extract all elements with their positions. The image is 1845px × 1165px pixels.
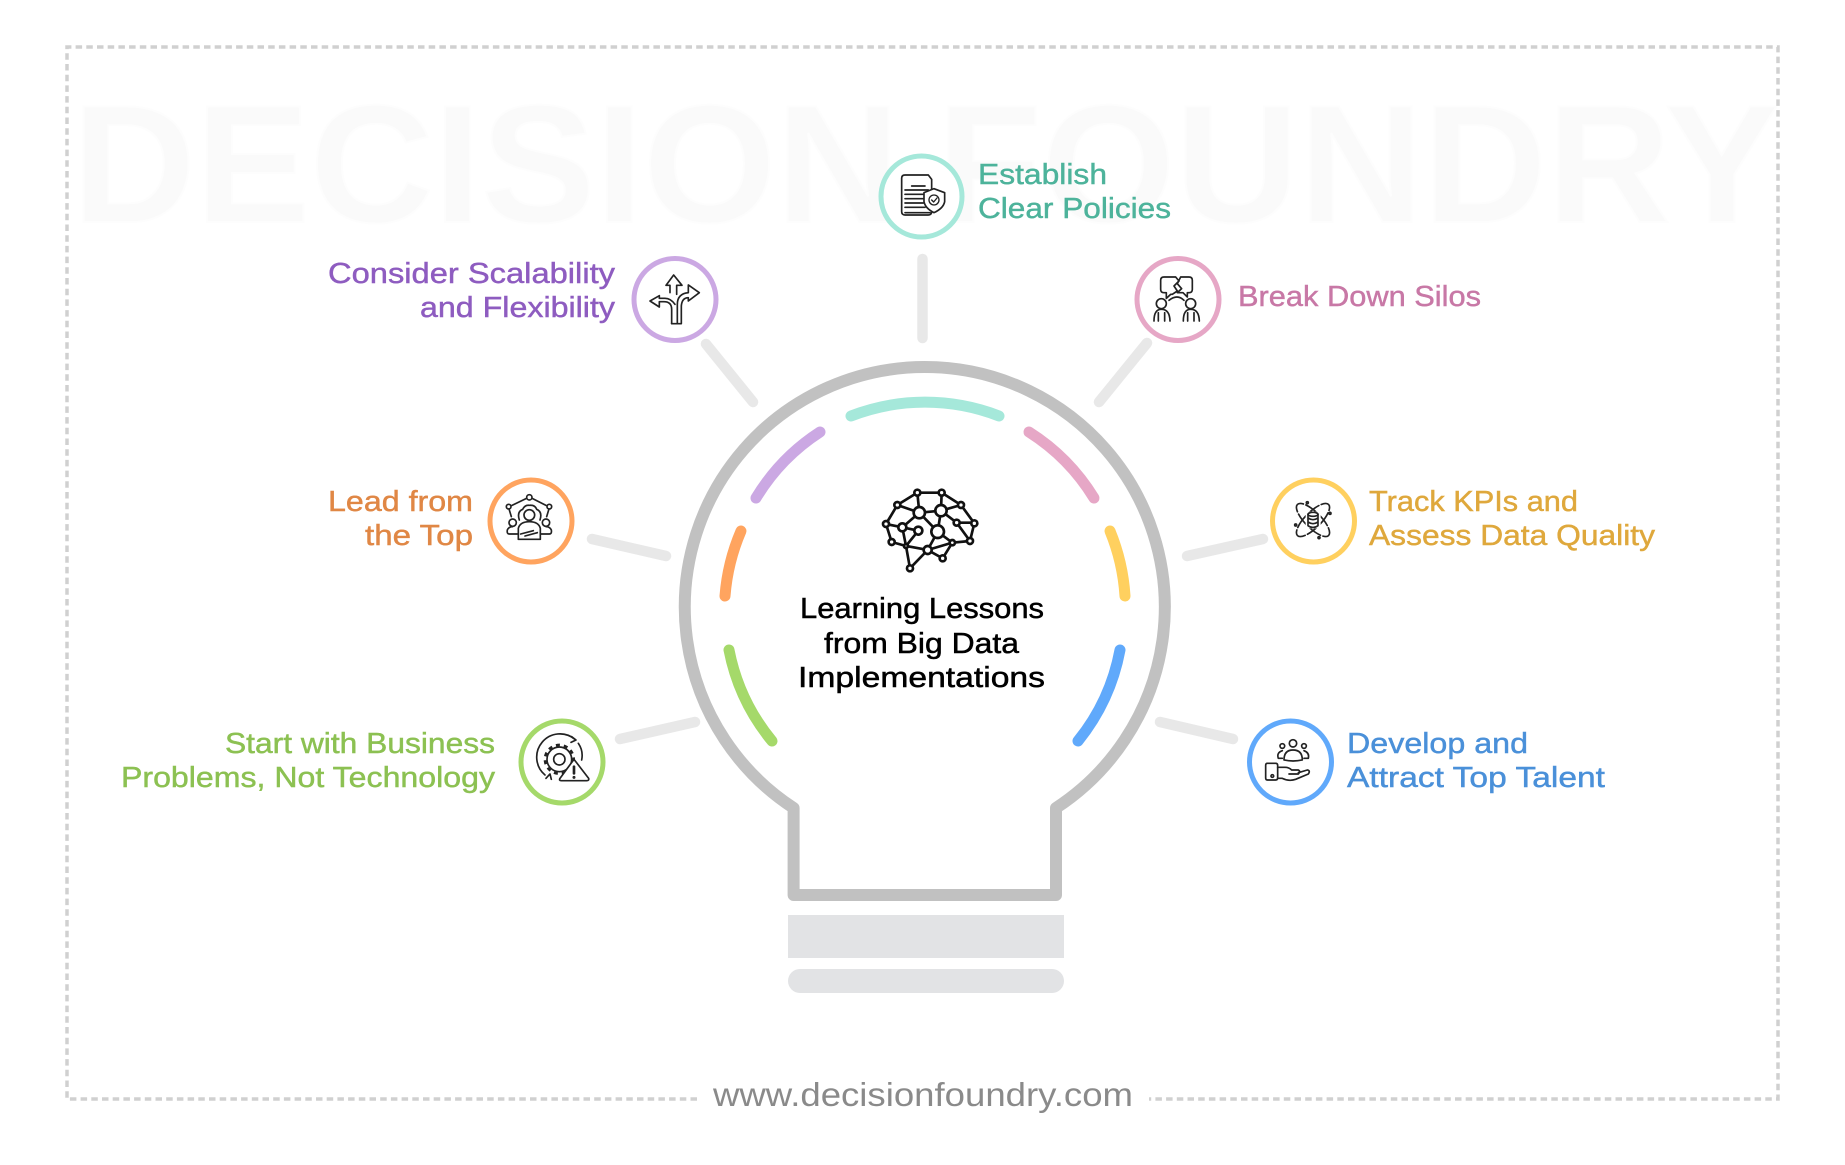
light bulb outline	[685, 367, 1165, 895]
watermark: Decision Foundry: DECISION	[72, 70, 900, 258]
icon: brain network	[883, 490, 977, 571]
item: Track KPIs and Assess Data Quality	[1272, 480, 1656, 562]
item: Consider Scalability and Flexibility: and Flexibility	[420, 292, 616, 324]
item: Lead from the Top: Lead from	[328, 486, 473, 518]
item: Establish Clear Policies: Clear Policies	[978, 193, 1171, 225]
watermark: Decision Foundry	[72, 70, 1779, 258]
centre title: Learning Lessons	[800, 593, 1044, 625]
item: Start with Business Problems, Not Technology: Start with Business	[225, 728, 495, 760]
item: Start with Business Problems, Not Technology: Problems, Not Technology	[121, 762, 496, 794]
item: Establish Clear Policies	[881, 156, 1171, 237]
bulb base pill	[788, 969, 1064, 993]
item: Establish Clear Policies: Establish	[978, 159, 1107, 191]
item: Track KPIs and Assess Data Quality: Track KPIs and	[1369, 486, 1578, 518]
item: Start with Business Problems, Not Technology	[121, 721, 603, 803]
bulb base band	[788, 915, 1064, 958]
centre title	[798, 593, 1045, 694]
centre title: Implementations	[798, 662, 1045, 694]
item: Lead from the Top	[328, 480, 572, 562]
item: Develop and Attract Top Talent	[1250, 721, 1605, 803]
item: Consider Scalability and Flexibility: Consider Scalability	[328, 258, 616, 290]
centre title: from Big Data	[824, 628, 1020, 660]
coloured arcs inside the bulb	[725, 402, 1125, 741]
footer website url: www.decisionfoundry.com	[712, 1076, 1133, 1113]
item: Break Down Silos: Break Down Silos	[1238, 281, 1481, 313]
item: Develop and Attract Top Talent: Develop and	[1347, 728, 1528, 760]
item: Develop and Attract Top Talent: Attract Top Talent	[1347, 762, 1605, 794]
item: Consider Scalability and Flexibility	[328, 258, 716, 340]
item: Track KPIs and Assess Data Quality: Assess Data Quality	[1369, 520, 1656, 552]
item: Lead from the Top: the Top	[365, 520, 473, 552]
item: Break Down Silos	[1137, 258, 1481, 340]
rays around the bulb	[592, 259, 1263, 739]
watermark: Decision Foundry: FOUNDRY	[937, 70, 1779, 258]
